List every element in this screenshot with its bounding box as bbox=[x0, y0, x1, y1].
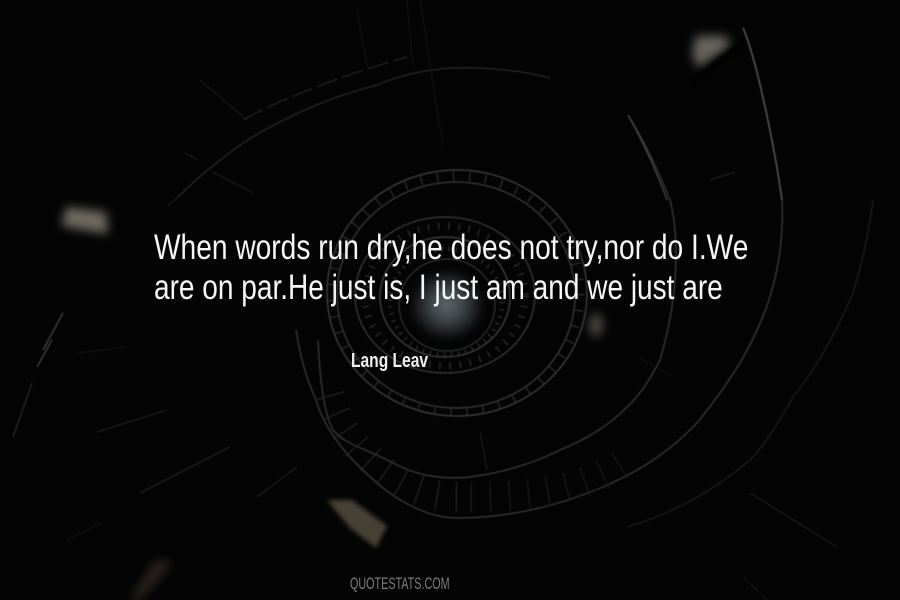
quote text bbox=[154, 228, 748, 307]
spiral handrails bbox=[178, 28, 873, 527]
light patch: top right wall bbox=[690, 36, 745, 84]
light patch: upper left wall bbox=[62, 207, 108, 234]
central light well bbox=[405, 265, 489, 345]
site credit: QUOTESTATS.COM bbox=[350, 574, 450, 593]
light patch: centre right bbox=[589, 313, 603, 337]
light patch: bottom left bbox=[130, 560, 173, 600]
quote line 2: are on par.He just is, I just am and we just are bbox=[154, 268, 723, 307]
light patch: bottom centre bbox=[327, 500, 387, 548]
author: Lang Leav bbox=[351, 349, 428, 372]
concentric stair rings bbox=[327, 170, 587, 416]
quote line 1: When words run dry,he does not try,nor do I.We bbox=[154, 228, 748, 267]
